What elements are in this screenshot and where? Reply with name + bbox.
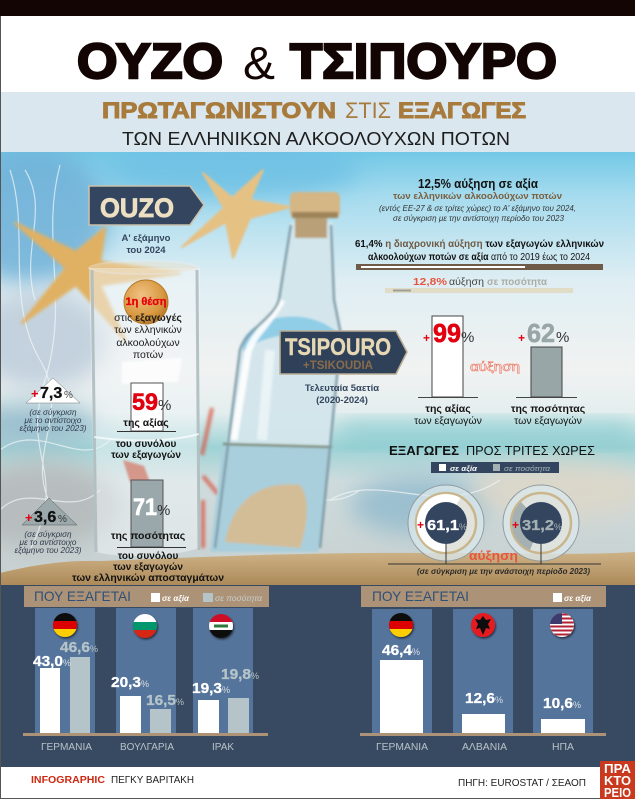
tsipouro sign: +TSIKOUDIA [303, 358, 373, 372]
bars: Germany: 43,0 [33, 653, 63, 670]
country labels [376, 742, 574, 753]
top black bar [0, 0, 635, 16]
71 percent volume bar: 71 [133, 494, 157, 521]
value growth bar: plus 99 percent [414, 316, 482, 427]
headline stat: 12.5 percent: σε σύγκριση με την αντίστοιχη περίοδο του 2023 [393, 213, 564, 223]
bars: Germany: % [63, 658, 71, 668]
third countries heading: ΠΡΟΣ ΤΡΙΤΕΣ ΧΩΡΕΣ [466, 443, 595, 458]
third countries heading: ΕΞΑΓΩΓΕΣ [389, 443, 459, 458]
bars: Germany: 46,6 [60, 639, 90, 656]
value growth bar: plus 99 percent: + [423, 331, 430, 345]
stat: 12.8 percent with bar: 12,8% [413, 276, 448, 288]
59 percent value bar [117, 383, 176, 432]
donut: plus 61.1 percent: 61,1 [427, 517, 459, 534]
bars: Germany [33, 639, 98, 733]
right header: where tsipouro is exported: σε αξία [564, 594, 592, 603]
share of spirits exports text: του συνόλου [118, 551, 178, 562]
first place description: των ελληνικών [114, 324, 182, 336]
volume growth bar: plus 62 percent: + [518, 331, 525, 345]
triangle: plus 7.3 percent [26, 378, 80, 403]
59 percent value bar: της αξίας [123, 417, 169, 429]
bars and values: 10,6 [543, 695, 573, 712]
note under first triangle: (σε σύγκριση [29, 408, 77, 417]
subtitle line one: ΠΡΩΤΑΓΩΝΙΣΤΟΥΝ [102, 98, 336, 123]
beach photo background [0, 140, 635, 590]
note under first triangle: εξάμηνο του 2023) [20, 424, 87, 433]
bars: Bulgaria: % [141, 679, 149, 689]
value growth bar: plus 99 percent: 99 [433, 318, 461, 348]
ouzo period label: Α' εξάμηνο [122, 233, 171, 244]
logo: ΠΡΑ [604, 762, 631, 776]
share of total exports text [111, 439, 181, 461]
ouzo period label: του 2024 [126, 245, 166, 256]
share of spirits exports text [72, 551, 224, 584]
headline stat: 12.5 percent [379, 176, 576, 223]
bars: Bulgaria [111, 674, 184, 733]
bars and values: 12,6 [465, 690, 495, 707]
flag: Germany [53, 613, 77, 637]
share of spirits exports text: των ελληνικών αποσταγμάτων [72, 573, 224, 584]
credit: INFOGRAPHIC [31, 774, 105, 786]
volume growth bar: plus 62 percent [511, 318, 586, 427]
credit: ΠΕΓΚΥ ΒΑΡΙΤΑΚΗ [111, 774, 194, 786]
first place medal [124, 280, 168, 324]
comparison note under donuts: (σε σύγκριση με την ανάστοιχη περίοδο 2023) [417, 566, 590, 576]
left header: where ouzo is exported: σε αξία [162, 594, 190, 603]
triangle: plus 7.3 percent: 7,3 [40, 385, 62, 402]
ouzo sign [89, 186, 204, 225]
stat: 61.4 percent with bar: αλκοολούχων ποτών σε αξία από το 2019 έως το 2024 [368, 251, 590, 263]
ouzo sign: OUZO [100, 193, 174, 223]
headline stat: 12.5 percent: 12,5% αύξηση σε αξία [418, 176, 538, 191]
stat: 12.8 percent with bar: σε ποσότητα [487, 276, 548, 288]
bars: Iraq: % [222, 685, 230, 695]
donut: plus 61.1 percent: + [417, 518, 424, 532]
stat: 12.8 percent with bar [385, 276, 573, 293]
credit [31, 774, 194, 786]
first place description: ποτών [133, 349, 163, 361]
tsipouro period label: Τελευταία 5αετία [305, 383, 379, 394]
note under second triangle: (σε σύγκριση [24, 530, 72, 539]
volume growth bar: plus 62 percent: % [556, 329, 569, 346]
subtitle line two: ΤΩΝ ΕΛΛΗΝΙΚΩΝ ΑΛΚΟΟΛΟΥΧΩΝ ΠΟΤΩΝ [122, 129, 510, 149]
59 percent value bar: 59 [132, 389, 158, 416]
59 percent value bar: % [158, 397, 171, 414]
subtitle line one [102, 98, 526, 123]
third countries legend: σε ποσότητα [504, 464, 551, 473]
glass [89, 260, 200, 556]
left header: where ouzo is exported [24, 586, 269, 607]
stat: 12.8 percent with bar: αύξηση [449, 276, 484, 288]
value growth bar: plus 99 percent: της αξίας [425, 403, 471, 415]
subtitle line one: ΕΞΑΓΩΓΕΣ [398, 98, 526, 123]
bars: Bulgaria: 16,5 [146, 692, 176, 709]
bars: Iraq [192, 666, 259, 733]
country labels: ΒΟΥΛΓΑΡΙΑ [120, 742, 174, 753]
third countries legend: σε αξία [450, 464, 477, 473]
bars and values [380, 642, 585, 733]
flag: Germany [389, 613, 413, 637]
logo: ΚΤΟ [604, 774, 631, 788]
bars: Iraq: % [251, 671, 259, 681]
sand [1, 552, 635, 585]
title [77, 35, 557, 89]
triangle: plus 3.6 percent: 3,6 [34, 509, 56, 526]
bars: Germany: % [90, 644, 98, 654]
tsipouro sign [280, 331, 407, 374]
71 percent volume bar: της ποσότητας [111, 530, 186, 542]
donut: plus 31.2 percent: + [512, 518, 519, 532]
flag: Albania [471, 613, 495, 637]
donut: plus 31.2 percent: % [554, 522, 562, 532]
title: & [243, 37, 275, 89]
country labels [41, 742, 234, 753]
flag: Iraq [209, 614, 233, 638]
value growth bar: plus 99 percent: των εξαγωγών [414, 415, 482, 427]
ouzo period label [122, 233, 171, 256]
bars and values: 46,4 [382, 642, 413, 659]
71 percent volume bar [111, 480, 186, 548]
third countries heading [389, 443, 595, 458]
navy lower panel [0, 585, 635, 767]
bars: Bulgaria: 20,3 [111, 674, 141, 691]
right starfish [182, 170, 290, 258]
subtitle band [0, 92, 635, 152]
country labels: ΓΕΡΜΑΝΙΑ [41, 742, 92, 753]
stat: 61.4 percent with bar: 61,4% η διαχρονική αύξηση των εξαγωγών ελληνικών [355, 239, 604, 250]
tsipouro sign: TSIPOURO [285, 334, 391, 361]
donut: plus 31.2 percent [503, 485, 579, 561]
title: ΤΣΙΠΟΥΡΟ [290, 35, 557, 89]
bars and values: % [495, 695, 503, 705]
first place description: στις εξαγωγές [114, 312, 182, 324]
flag: Bulgaria [133, 614, 157, 638]
share of total exports text: των εξαγωγών [111, 450, 181, 461]
country labels: ΗΠΑ [552, 742, 574, 753]
value growth bar: plus 99 percent: % [461, 329, 474, 346]
red starfish behind bottle [200, 406, 218, 550]
volume growth bar: plus 62 percent: της ποσότητας [511, 403, 586, 415]
first place description [114, 312, 182, 361]
right bar chart [360, 609, 606, 753]
bars and values: % [412, 647, 420, 657]
stat: 61.4 percent with bar [355, 239, 604, 270]
note under second triangle: με το αντίστοιχο [19, 538, 77, 547]
bottle [210, 192, 341, 552]
triangle: plus 3.6 percent: % [58, 514, 67, 525]
note under second triangle: εξάμηνο του 2023) [15, 546, 82, 555]
note under first triangle [20, 408, 87, 433]
tsipouro period label [305, 383, 379, 406]
left header: where ouzo is exported: σε ποσότητα [215, 594, 262, 603]
source: ΠΗΓΗ: EUROSTAT / ΣΕΑΟΠ [458, 777, 586, 789]
share of total exports text: του συνόλου [116, 439, 176, 450]
country labels: ΓΕΡΜΑΝΙΑ [376, 742, 428, 753]
bars: Iraq: 19,8 [221, 666, 251, 683]
donut: plus 61.1 percent: % [459, 522, 467, 532]
triangle: plus 3.6 percent: + [25, 510, 33, 525]
volume growth bar: plus 62 percent: των εξαγωγών [514, 415, 582, 427]
right header: where tsipouro is exported [361, 586, 606, 607]
growth label: αύξηση [470, 359, 520, 374]
triangle: plus 7.3 percent: % [64, 390, 73, 401]
share of spirits exports text: των εξαγωγών [113, 562, 183, 573]
donut: plus 31.2 percent: 31,2 [522, 517, 554, 534]
country labels: ΑΛΒΑΝΙΑ [462, 742, 507, 753]
bars and values: % [573, 700, 581, 710]
note under first triangle: με το αντίστοιχο [24, 416, 82, 425]
flag: USA [550, 613, 574, 637]
first place medal: 1η θέση [125, 296, 167, 308]
bars: Bulgaria: % [176, 697, 184, 707]
right header: where tsipouro is exported: ΠΟΥ ΕΞΑΓΕΤΑΙ [372, 588, 469, 604]
note under second triangle [15, 530, 82, 555]
donut connector lines [388, 544, 601, 564]
subtitle line one: ΣΤΙΣ [345, 98, 391, 123]
triangle: plus 3.6 percent [22, 498, 77, 526]
tsipouro period label: (2020-2024) [316, 395, 368, 406]
headline stat: 12.5 percent: των ελληνικών αλκοολούχων ποτών [393, 191, 562, 202]
bars: Iraq: 19,3 [192, 680, 222, 697]
first place description: αλκοολούχων [116, 337, 180, 349]
title: ΟΥΖΟ [77, 35, 223, 89]
71 percent volume bar: % [157, 502, 170, 519]
left starfish [15, 223, 180, 340]
left bar chart [23, 608, 268, 753]
donut: plus 61.1 percent [408, 485, 484, 561]
third countries legend [431, 462, 559, 473]
net strands [0, 165, 500, 550]
left header: where ouzo is exported: ΠΟΥ ΕΞΑΓΕΤΑΙ [34, 588, 131, 604]
logo [600, 761, 635, 799]
volume growth bar: plus 62 percent: 62 [527, 318, 555, 348]
headline stat: 12.5 percent: (εντός ΕΕ-27 & σε τρίτες χώρες) το Α' εξάμηνο του 2024, [379, 203, 576, 213]
growth label under donuts: αύξηση [469, 548, 518, 563]
triangle: plus 7.3 percent: + [31, 386, 39, 401]
country labels: ΙΡΑΚ [212, 742, 234, 753]
